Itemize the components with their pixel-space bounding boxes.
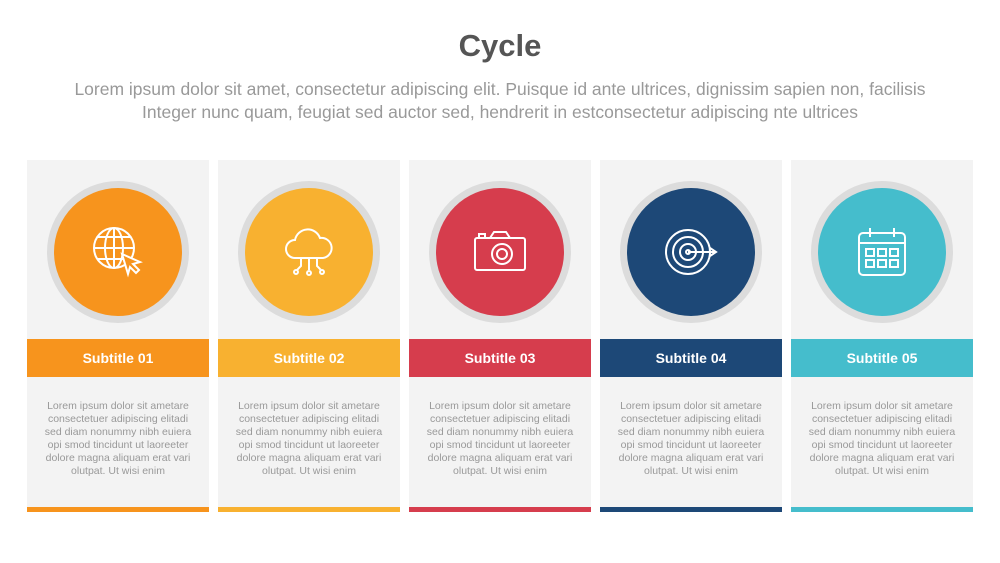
text 04: Lorem ipsum dolor sit ametare — [620, 400, 762, 412]
icon: camera — [429, 181, 571, 323]
text 04: consectetuer adipiscing elitadi — [621, 413, 761, 425]
text 04: dolore magna aliquam erat vari — [619, 452, 763, 464]
text 05: olutpat. Ut wisi enim — [835, 465, 929, 477]
text 01: dolore magna aliquam erat vari — [46, 452, 190, 464]
text 03 — [427, 400, 574, 477]
icon: calendar — [811, 181, 953, 323]
text 05: consectetuer adipiscing elitadi — [812, 413, 952, 425]
description: Integer nunc quam, feugiat sed auctor sed, hendrerit in estconsectetur adipiscing nte ultrices — [142, 102, 858, 122]
icon: target — [620, 181, 762, 323]
text 01: opi smod tincidunt ut laoreeter — [48, 439, 188, 451]
subtitle 04: Subtitle 04 — [656, 350, 726, 366]
text 02: opi smod tincidunt ut laoreeter — [239, 439, 379, 451]
description — [74, 79, 926, 122]
text 02: sed diam nonummy nibh euiera — [236, 426, 382, 438]
subtitle 05: Subtitle 05 — [847, 350, 917, 366]
subtitle 03: Subtitle 03 — [465, 350, 535, 366]
text 05: opi smod tincidunt ut laoreeter — [812, 439, 952, 451]
title: Cycle — [459, 28, 541, 63]
text 02: dolore magna aliquam erat vari — [237, 452, 381, 464]
text 03: olutpat. Ut wisi enim — [453, 465, 547, 477]
text 01: consectetuer adipiscing elitadi — [48, 413, 188, 425]
text 04: olutpat. Ut wisi enim — [644, 465, 738, 477]
icon: globe — [47, 181, 189, 323]
text 03: Lorem ipsum dolor sit ametare — [429, 400, 571, 412]
subtitle 01 — [27, 339, 209, 377]
icon: cloud — [238, 181, 380, 323]
subtitle 03 — [409, 339, 591, 377]
panel: step 2 — [218, 160, 400, 512]
text 03: sed diam nonummy nibh euiera — [427, 426, 573, 438]
text 04 — [618, 400, 764, 477]
subtitle 01: Subtitle 01 — [83, 350, 153, 366]
text 01: Lorem ipsum dolor sit ametare — [47, 400, 189, 412]
subtitle 04 — [600, 339, 782, 377]
panel: step 4 — [600, 160, 782, 512]
text 01: sed diam nonummy nibh euiera — [45, 426, 191, 438]
panel: step 3 — [409, 160, 591, 512]
text 05 — [809, 400, 956, 477]
panel: step 1 — [27, 160, 209, 512]
text 05: dolore magna aliquam erat vari — [810, 452, 954, 464]
subtitle 02 — [218, 339, 400, 377]
text 04: sed diam nonummy nibh euiera — [618, 426, 764, 438]
text 03: dolore magna aliquam erat vari — [428, 452, 572, 464]
text 02: olutpat. Ut wisi enim — [262, 465, 356, 477]
text 02: consectetuer adipiscing elitadi — [239, 413, 379, 425]
subtitle 05 — [791, 339, 973, 377]
text 05: sed diam nonummy nibh euiera — [809, 426, 955, 438]
text 03: opi smod tincidunt ut laoreeter — [430, 439, 570, 451]
text 04: opi smod tincidunt ut laoreeter — [621, 439, 761, 451]
text 02 — [236, 400, 382, 477]
description: Lorem ipsum dolor sit amet, consectetur adipiscing elit. Puisque id ante ultrices, dignissim sapien non, facilisis — [74, 79, 926, 99]
text 01: olutpat. Ut wisi enim — [71, 465, 165, 477]
text 02: Lorem ipsum dolor sit ametare — [238, 400, 380, 412]
subtitle 02: Subtitle 02 — [274, 350, 344, 366]
text 01 — [45, 400, 192, 477]
text 03: consectetuer adipiscing elitadi — [430, 413, 570, 425]
panel: step 5 — [791, 160, 973, 512]
text 05: Lorem ipsum dolor sit ametare — [811, 400, 953, 412]
